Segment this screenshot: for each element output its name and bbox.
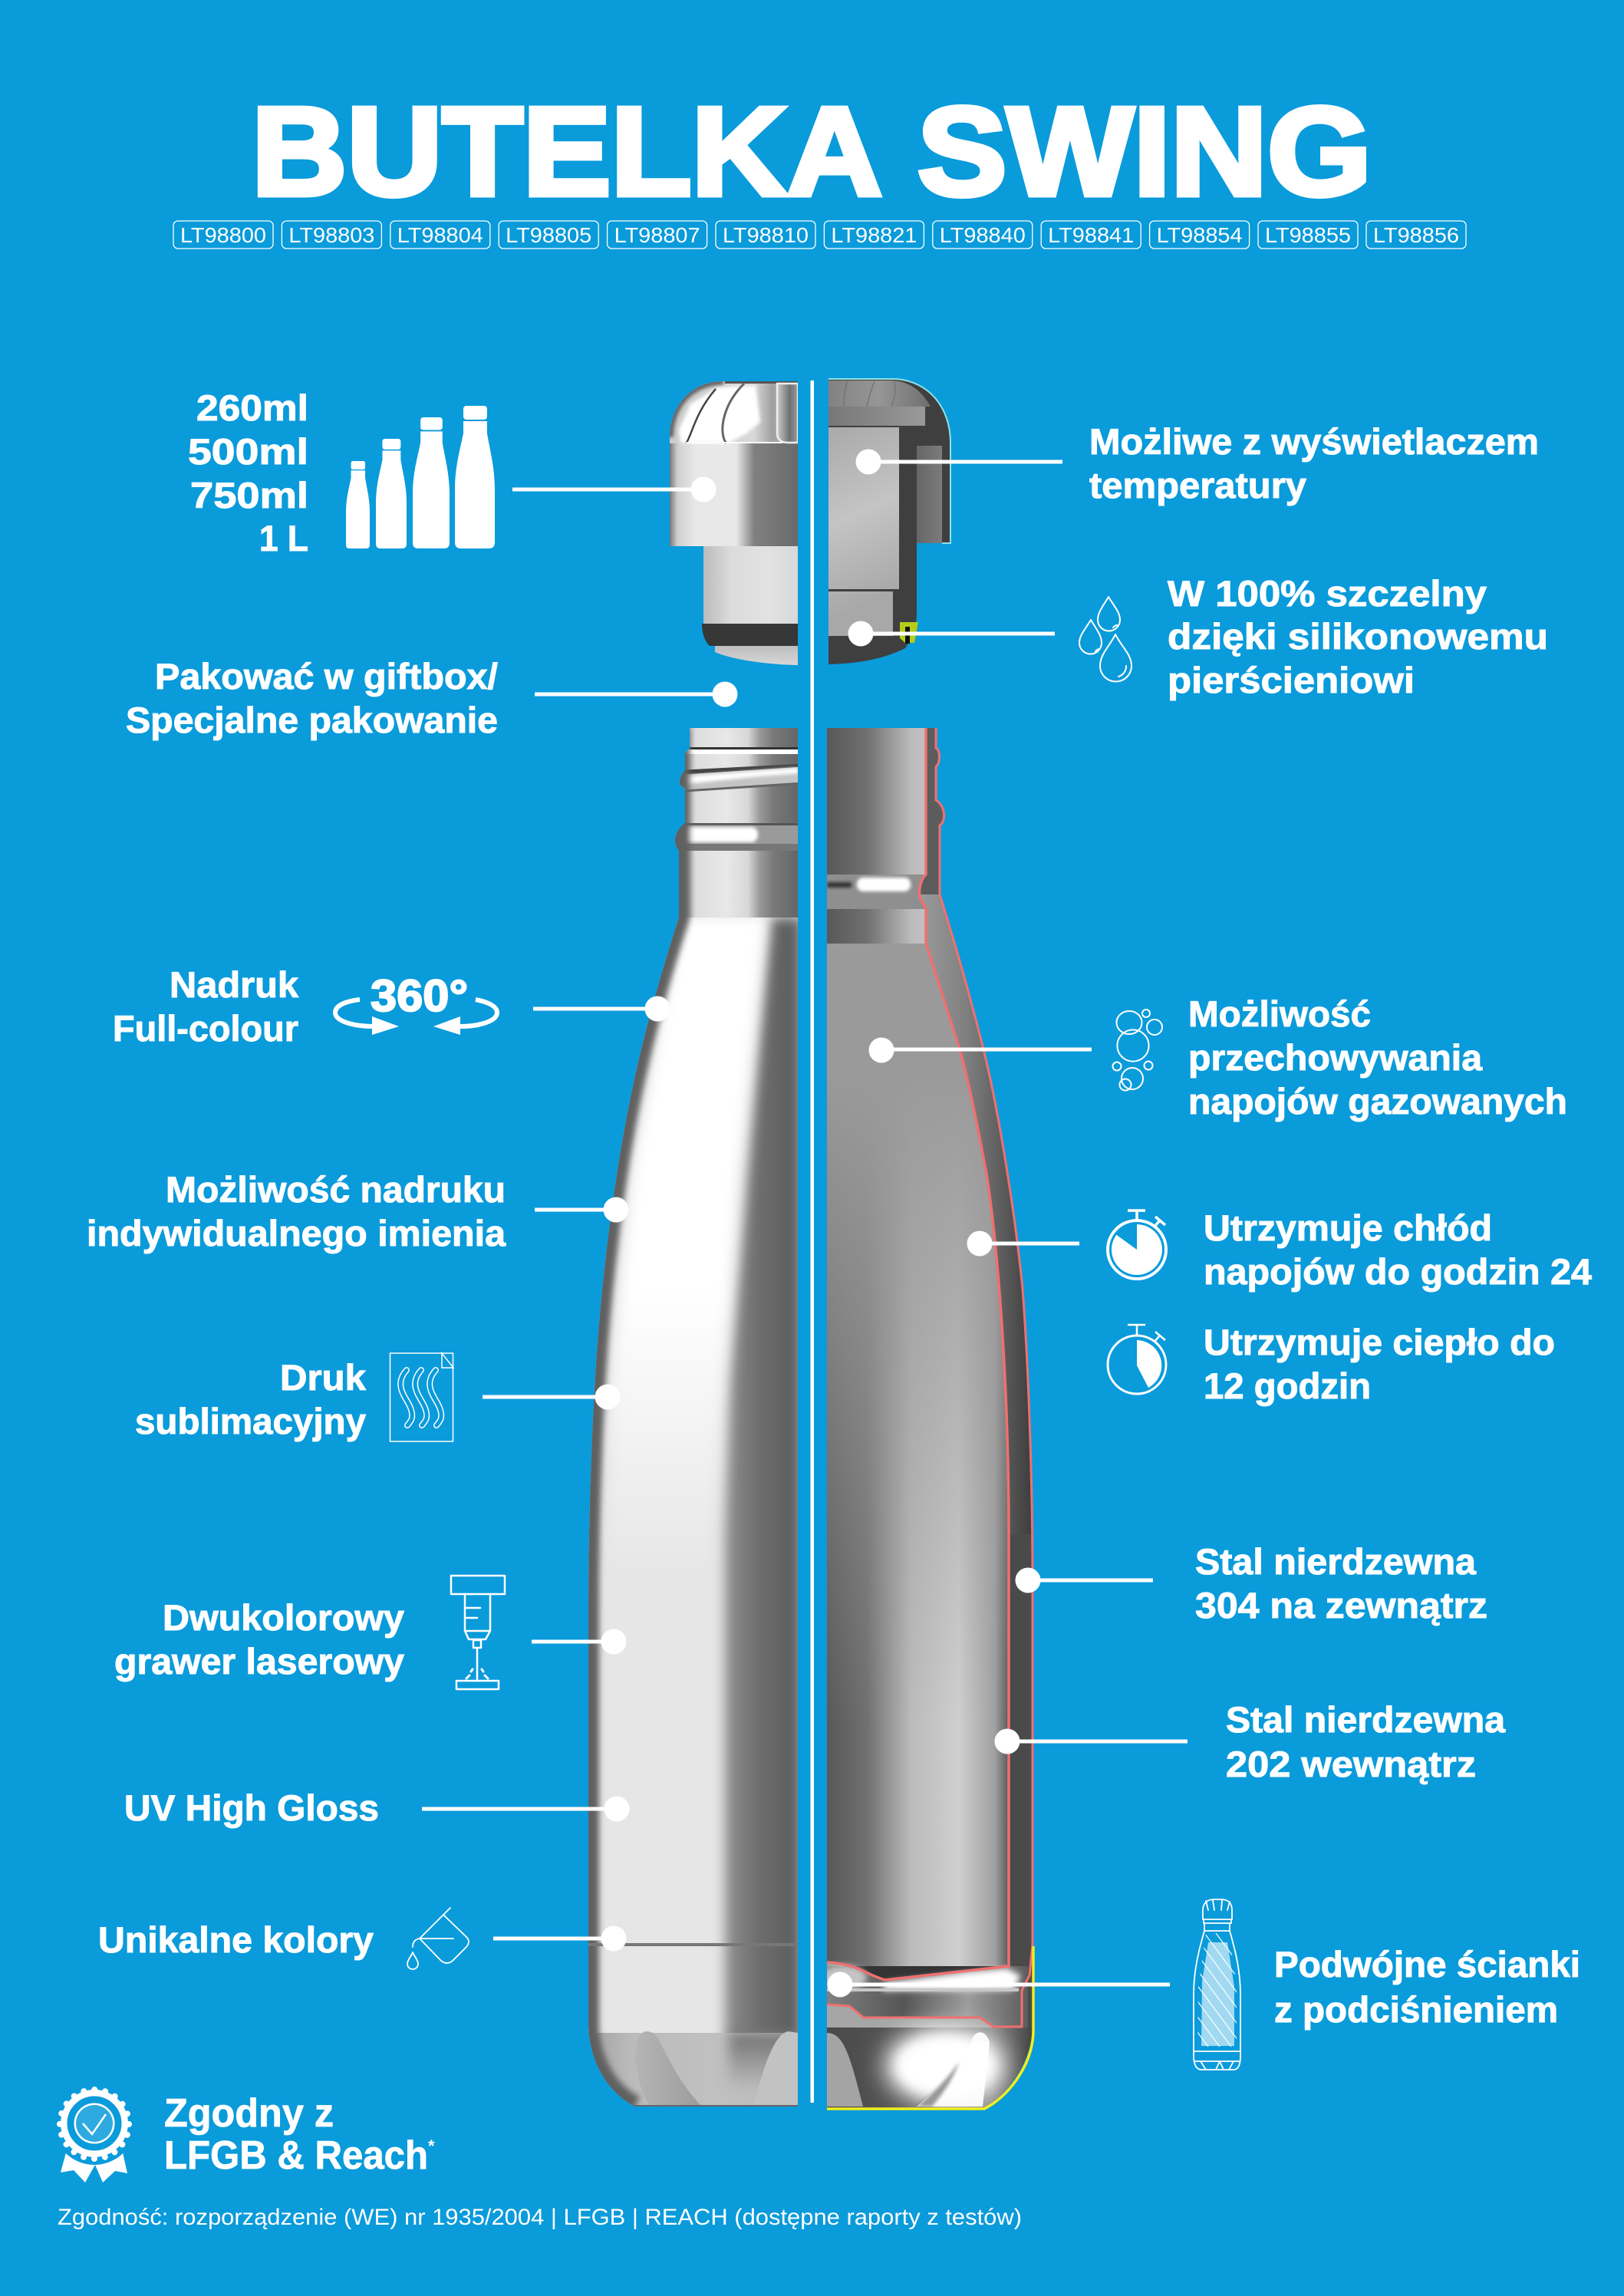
bottle cap exterior (left half) <box>670 381 798 665</box>
callout: UV gloss: UV High Gloss <box>124 1787 379 1828</box>
callout: stainless 304: Stal nierdzewna <box>1195 1541 1477 1582</box>
callout: leakproof: dzięki silikonowemu <box>1168 616 1548 657</box>
footnote: Zgodność: rozporządzenie (WE) nr 1935/2004 | LFGB | REACH (dostępne raporty z testów) <box>58 2205 1022 2230</box>
icon: sublimation sheet <box>390 1353 453 1441</box>
callout: leakproof: W 100% szczelny <box>1168 573 1487 614</box>
icon: paint bucket <box>407 1908 469 1969</box>
inner wall line (202 steel) <box>827 728 1009 1980</box>
callout: warm 12h: Utrzymuje ciepło do <box>1204 1322 1555 1362</box>
product code tags: LT98821 <box>831 223 917 247</box>
callout: temperature display <box>856 421 1539 506</box>
callout: carbonated drinks <box>868 993 1567 1122</box>
icon: water drops <box>1079 597 1132 681</box>
callout: carbonated drinks: przechowywania <box>1188 1037 1483 1078</box>
product code tags: LT98805 <box>506 223 591 247</box>
callout: carbonated drinks: Możliwość <box>1188 993 1371 1034</box>
product code tags <box>173 221 1466 249</box>
callout: double vacuum wall: z podciśnieniem <box>1274 1989 1558 2030</box>
product code tags: LT98856 <box>1373 223 1459 247</box>
callout: cold 24h: Utrzymuje chłód <box>1204 1207 1492 1248</box>
callout: packaging: Specjalne pakowanie <box>126 700 498 740</box>
icon: stopwatch one third <box>1108 1325 1166 1394</box>
icon: four bottle sizes <box>346 406 495 548</box>
callout: capacities: 500ml <box>188 431 308 472</box>
callout: full-colour print <box>113 964 670 1049</box>
product code tags: LT98803 <box>288 223 374 247</box>
outer wall line (304 steel) <box>827 728 1033 2027</box>
callout: full-colour print: Full-colour <box>113 1008 298 1049</box>
product code tags: LT98810 <box>723 223 809 247</box>
title: BUTELKA <box>252 81 882 222</box>
callout: capacities <box>188 387 716 558</box>
compliance badge <box>53 2082 435 2182</box>
callout: capacities: 750ml <box>190 475 308 516</box>
callout: stainless 304: 304 na zewnątrz <box>1195 1585 1487 1626</box>
compliance badge: Zgodny z <box>164 2091 334 2136</box>
compliance badge: * <box>428 2136 435 2156</box>
callout: name print: indywidualnego imienia <box>87 1213 506 1253</box>
icon: 360 rotation: 360° <box>371 971 468 1021</box>
callout: laser engraving: grawer laserowy <box>114 1641 404 1682</box>
callout: packaging: Pakować w giftbox/ <box>155 656 498 697</box>
product code tags: LT98840 <box>940 223 1026 247</box>
callout: name print <box>87 1169 629 1253</box>
callout: double vacuum wall: Podwójne ścianki <box>1274 1944 1580 1985</box>
product code tags: LT98807 <box>614 223 700 247</box>
product code tags: LT98841 <box>1048 223 1134 247</box>
callout: UV gloss <box>124 1787 629 1828</box>
callout: stainless 304 <box>1016 1541 1487 1626</box>
bottle body cross-section (right half) <box>821 728 1034 2117</box>
title <box>252 81 1372 222</box>
title: SWING <box>917 81 1372 222</box>
callout: carbonated drinks: napojów gazowanych <box>1188 1081 1567 1122</box>
callout: temperature display: Możliwe z wyświetlaczem <box>1089 421 1539 462</box>
icon: bubbles <box>1112 1010 1162 1091</box>
divider <box>810 380 814 2103</box>
product code tags: LT98854 <box>1157 223 1243 247</box>
icon: 360 rotation <box>335 971 497 1035</box>
callout: packaging <box>126 656 738 740</box>
icon: rosette with check <box>53 2082 136 2182</box>
compliance badge: LFGB & Reach <box>164 2133 428 2178</box>
callout: warm 12h: 12 godzin <box>1204 1365 1371 1406</box>
callout: laser engraving: Dwukolorowy <box>163 1597 404 1638</box>
callout: stainless 202: 202 wewnątrz <box>1226 1744 1476 1784</box>
callout: capacities: 1 L <box>259 518 308 558</box>
icon: mini bottle with print area <box>1193 1899 1241 2070</box>
callout: leakproof: pierścieniowi <box>1168 660 1415 700</box>
callout: laser engraving <box>114 1576 626 1689</box>
callout: name print: Możliwość nadruku <box>166 1169 506 1210</box>
callout: full-colour print: Nadruk <box>170 964 299 1005</box>
callout: stainless 202 <box>994 1699 1506 1784</box>
callout: unique colours: Unikalne kolory <box>98 1919 374 1960</box>
icon: stopwatch three quarters <box>1108 1211 1166 1279</box>
callout: temperature display: temperatury <box>1089 465 1306 506</box>
callout: capacities: 260ml <box>196 387 308 428</box>
callout: unique colours <box>98 1908 626 1969</box>
callout: sublimation: Druk <box>280 1357 367 1398</box>
product code tags: LT98855 <box>1265 223 1351 247</box>
callout: leakproof <box>848 573 1548 700</box>
icon: laser engraver <box>451 1576 505 1689</box>
callout: stainless 202: Stal nierdzewna <box>1226 1699 1506 1740</box>
callout: sublimation: sublimacyjny <box>135 1401 366 1441</box>
silicone ring <box>900 622 918 644</box>
callout: cold 24h: napojów do godzin 24 <box>1204 1251 1592 1292</box>
vacuum outer coating line <box>827 1946 1033 2109</box>
callout: cold 24h <box>967 1207 1592 1292</box>
callout: double vacuum wall <box>827 1899 1580 2070</box>
bottle cap cross-section (right half) <box>828 379 950 664</box>
callout: warm 12h <box>1108 1322 1555 1406</box>
product code tags: LT98804 <box>397 223 483 247</box>
bottle body exterior (left half) <box>583 728 802 2110</box>
callout: sublimation <box>135 1353 620 1441</box>
product code tags: LT98800 <box>180 223 266 247</box>
